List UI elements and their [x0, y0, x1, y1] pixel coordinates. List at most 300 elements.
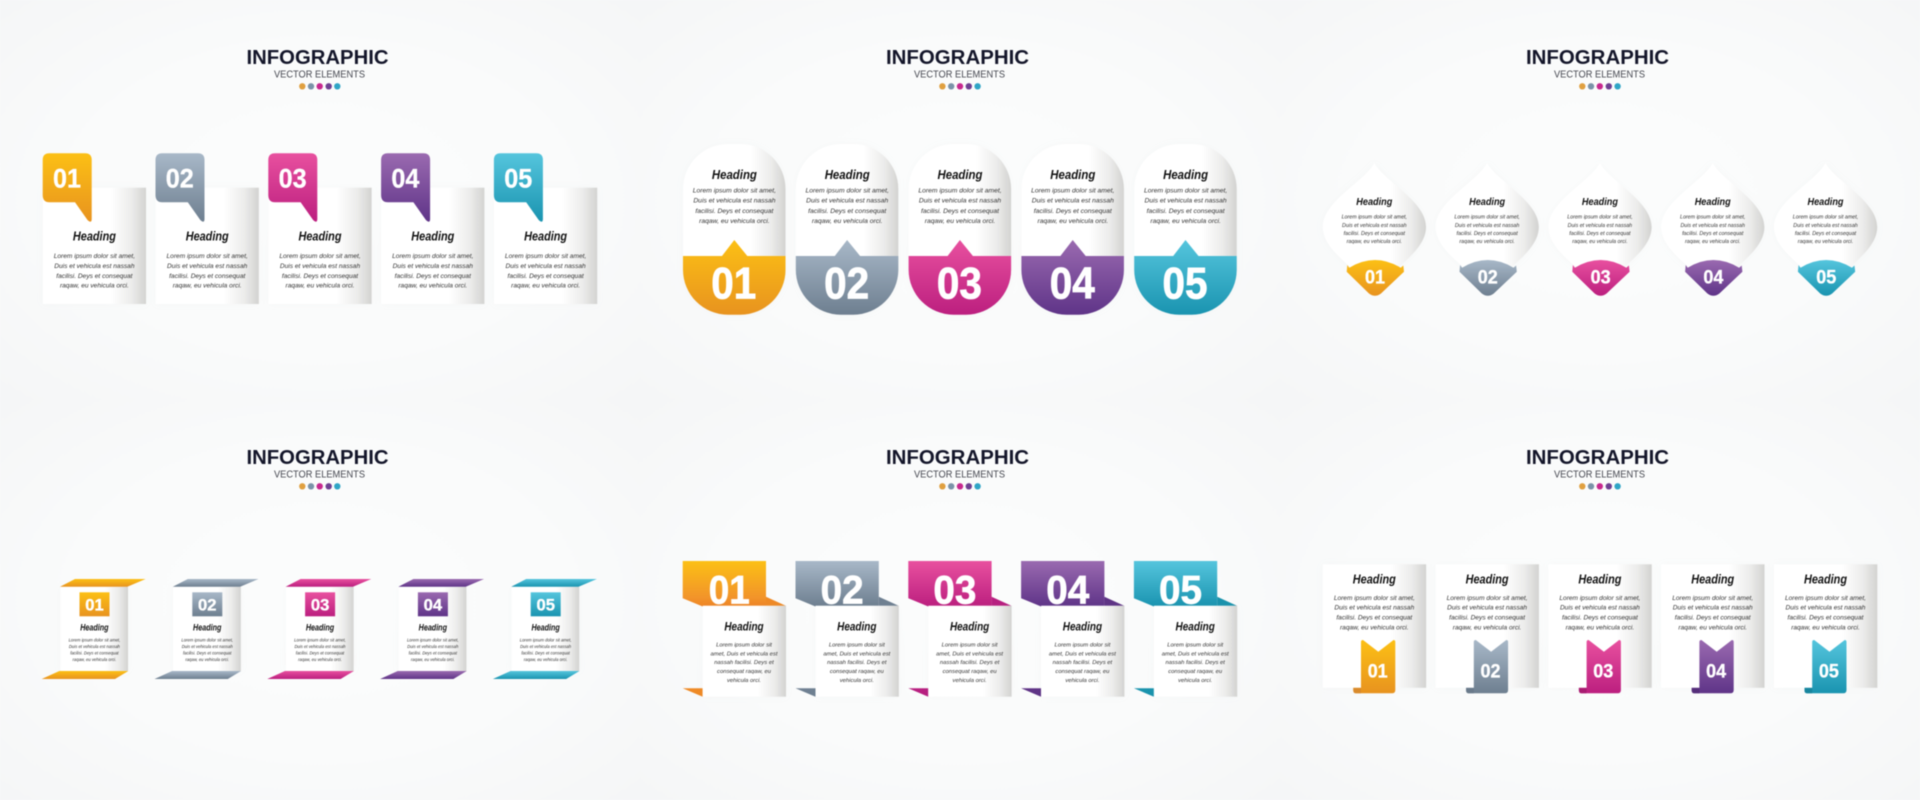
body text: raqaw, eu vehicula orci.: [925, 218, 995, 225]
card 02: [796, 144, 898, 315]
body text: Lorem ipsum dolor sit amet,: [1793, 215, 1858, 221]
card 02: [796, 561, 899, 697]
body text: facilisi. Deys et consequat: [1456, 231, 1518, 237]
pill body: [1021, 144, 1124, 315]
body text: Lorem ipsum dolor sit: [829, 642, 885, 648]
body text: Duis et vehicula est nassah: [1560, 605, 1640, 612]
ribbon curl: [1466, 688, 1474, 693]
body text: vehicula orci.: [727, 678, 761, 684]
body text: consequat raqaw, eu: [1168, 669, 1223, 675]
card 05: [494, 153, 597, 304]
panel background: [640, 0, 1280, 400]
title block: [886, 47, 1029, 90]
card 04: [1661, 163, 1764, 296]
heading: Heading: [73, 230, 116, 244]
title: INFOGRAPHIC: [886, 447, 1029, 469]
body text: Duis et vehicula est nassah: [1568, 223, 1632, 229]
body text: raqaw, eu vehicula orci.: [1678, 625, 1747, 632]
body text: Duis et vehicula est nassah: [182, 644, 233, 649]
number tag: [1685, 260, 1742, 296]
panel background: [640, 400, 1280, 800]
card 03: [909, 144, 1011, 315]
ribbon curl: [1353, 688, 1361, 693]
body text: Lorem ipsum dolor sit amet,: [693, 188, 776, 194]
card body: [268, 188, 372, 304]
card body: [173, 587, 241, 671]
panel: top-centre pill cards: [640, 0, 1280, 400]
card 03: [908, 561, 1012, 697]
body text: consequat raqaw, eu: [943, 669, 997, 675]
lower fold: [1021, 688, 1041, 697]
body text: raqaw, eu vehicula orci.: [524, 657, 567, 662]
heading: Heading: [299, 230, 342, 244]
number: 04: [1050, 259, 1095, 308]
pill body: [796, 144, 898, 315]
body text: Duis et vehicula est nassah: [1786, 605, 1866, 612]
panel: bottom-centre folded banner cards: [640, 400, 1280, 800]
card 05: [493, 579, 597, 679]
body text: raqaw, eu vehicula orci.: [1459, 239, 1515, 245]
heading: Heading: [1691, 572, 1735, 586]
bottom parallelogram: [154, 671, 241, 679]
ribbon: [1466, 640, 1508, 693]
panel background: [1280, 0, 1920, 400]
number base with pointer: [683, 240, 786, 315]
card 01: [683, 561, 786, 697]
body text: nassah facilisi. Deys et: [1053, 660, 1112, 666]
heading: Heading: [837, 620, 877, 634]
pill body: [683, 144, 786, 315]
body text: Lorem ipsum dolor sit: [1167, 642, 1223, 648]
number base with pointer: [796, 240, 898, 315]
body text: Lorem ipsum dolor sit amet,: [181, 638, 233, 642]
body text: Lorem ipsum dolor sit amet,: [294, 638, 346, 642]
panel: bottom-right ribbon cards: [1280, 400, 1920, 800]
body text: consequat raqaw, eu: [830, 669, 885, 675]
number: 02: [1478, 268, 1498, 288]
top parallelogram: [60, 579, 146, 587]
subtitle: VECTOR ELEMENTS: [914, 70, 1005, 80]
body text: raqaw, eu vehicula orci.: [1572, 239, 1628, 245]
title block: [246, 447, 388, 489]
subtitle: VECTOR ELEMENTS: [274, 470, 365, 480]
card 01: [1323, 564, 1426, 693]
title block: [1526, 47, 1669, 90]
panel background: [0, 400, 640, 800]
body text: nassah facilisi. Deys et: [827, 660, 887, 666]
card body: [1774, 564, 1877, 688]
banner: [683, 561, 766, 606]
body text: facilisi. Deys et consequat: [183, 650, 232, 656]
body text: raqaw, eu vehicula orci.: [699, 218, 770, 225]
body text: raqaw, eu vehicula orci.: [398, 283, 467, 290]
heading: Heading: [186, 230, 229, 244]
body text: facilisi. Deys et consequat: [921, 208, 1000, 215]
number square: [418, 592, 448, 616]
number: 05: [504, 163, 532, 193]
card body: [1323, 564, 1426, 688]
card 05: [1134, 561, 1237, 697]
number: 05: [1816, 268, 1837, 288]
card 01: [43, 153, 146, 304]
number tag: [268, 153, 317, 222]
body text: raqaw, eu vehicula orci.: [1566, 625, 1634, 632]
card 02: [156, 153, 259, 304]
body text: raqaw, eu vehicula orci.: [1791, 625, 1860, 632]
body text: Duis et vehicula est nassah: [407, 644, 459, 649]
colour dots: [1579, 483, 1621, 489]
body text: Duis et vehicula est nassah: [520, 644, 572, 649]
card body: [1436, 564, 1539, 688]
diamond body: [1548, 163, 1652, 291]
heading: Heading: [950, 620, 990, 634]
body text: facilisi. Deys et consequat: [1034, 208, 1113, 215]
lower fold: [1134, 688, 1154, 697]
body text: Duis et vehicula est nassah: [393, 263, 473, 270]
body text: Lorem ipsum dolor sit amet,: [1454, 215, 1520, 221]
heading: Heading: [80, 623, 109, 633]
number tag: [43, 153, 92, 222]
body text: Lorem ipsum dolor sit amet,: [505, 253, 586, 260]
number tag: [1460, 260, 1517, 296]
body text: facilisi. Deys et consequat: [1562, 615, 1639, 622]
bottom parallelogram: [380, 671, 467, 679]
card 05: [1134, 144, 1237, 315]
body text: Lorem ipsum dolor sit amet,: [279, 253, 361, 260]
diamond body: [1436, 163, 1539, 291]
body text: vehicula orci.: [840, 678, 874, 684]
body text: raqaw, eu vehicula orci.: [286, 283, 355, 290]
card body: [928, 606, 1012, 697]
card 05: [1774, 564, 1877, 693]
title: INFOGRAPHIC: [1526, 447, 1669, 469]
body text: Lorem ipsum dolor sit amet,: [392, 253, 474, 260]
body text: Lorem ipsum dolor sit amet,: [1447, 595, 1528, 602]
lower fold: [908, 688, 928, 697]
body text: nassah facilisi. Deys et: [940, 660, 1000, 666]
heading: Heading: [1176, 620, 1215, 634]
card body: [381, 188, 484, 304]
top parallelogram: [511, 579, 597, 587]
title block: [1526, 447, 1669, 489]
number tag: [381, 153, 430, 222]
subtitle: VECTOR ELEMENTS: [274, 70, 365, 80]
body text: Duis et vehicula est nassah: [69, 644, 121, 649]
number: 03: [937, 259, 982, 308]
number: 02: [166, 163, 194, 193]
heading: Heading: [1582, 196, 1618, 208]
card 01: [1323, 163, 1426, 296]
ribbon: [1579, 640, 1621, 693]
card 02: [1436, 564, 1539, 693]
body text: facilisi. Deys et consequat: [296, 650, 345, 656]
subtitle: VECTOR ELEMENTS: [1554, 470, 1645, 480]
body text: Duis et vehicula est nassah: [1334, 605, 1415, 612]
body text: vehicula orci.: [1065, 678, 1099, 684]
body text: Lorem ipsum dolor sit amet,: [1144, 188, 1227, 194]
diamond body: [1774, 163, 1877, 291]
banner: [796, 561, 879, 606]
card 05: [1774, 163, 1877, 296]
banner: [908, 561, 992, 606]
panel: top-right diamond cards: [1280, 0, 1920, 400]
number: 03: [1591, 268, 1611, 288]
body text: facilisi. Deys et consequat: [169, 273, 246, 280]
heading: Heading: [1353, 572, 1396, 586]
number: 04: [391, 163, 419, 193]
number: 05: [1162, 259, 1208, 308]
card body: [494, 188, 597, 304]
body text: Duis et vehicula est nassah: [1447, 605, 1527, 612]
heading: Heading: [825, 167, 870, 182]
heading: Heading: [419, 623, 447, 633]
card 04: [1021, 144, 1124, 315]
ribbon: [1692, 640, 1734, 693]
number square: [305, 592, 335, 616]
heading: Heading: [411, 230, 455, 244]
body text: Duis et vehicula est nassah: [1145, 198, 1227, 204]
body text: facilisi. Deys et consequat: [1569, 231, 1631, 237]
banner: [1021, 561, 1104, 606]
body text: Lorem ipsum dolor sit amet,: [69, 638, 120, 642]
number: 03: [279, 163, 307, 193]
number tag: [1347, 260, 1404, 296]
bottom parallelogram: [267, 671, 354, 679]
ribbon curl: [1692, 688, 1699, 693]
pill body: [909, 144, 1011, 315]
banner fold: [1217, 597, 1237, 606]
body text: Lorem ipsum dolor sit amet,: [918, 188, 1002, 194]
card body: [512, 587, 579, 671]
banner fold: [992, 597, 1011, 606]
diamond body: [1323, 163, 1426, 291]
card 03: [268, 153, 372, 304]
lower fold: [683, 688, 703, 697]
subtitle: VECTOR ELEMENTS: [914, 470, 1005, 480]
body text: facilisi. Deys et consequat: [70, 650, 119, 656]
title: INFOGRAPHIC: [246, 47, 388, 69]
ribbon: [1353, 640, 1395, 693]
number: 02: [198, 596, 217, 615]
heading: Heading: [1163, 167, 1208, 182]
heading: Heading: [1356, 196, 1393, 208]
card 04: [1661, 564, 1764, 693]
body text: nassah facilisi. Deys et: [1165, 660, 1225, 666]
colour dots: [299, 83, 340, 90]
body text: facilisi. Deys et consequat: [56, 273, 134, 280]
number: 02: [821, 568, 864, 612]
body text: Duis et vehicula est nassah: [693, 198, 776, 204]
body text: Duis et vehicula est nassah: [1793, 223, 1858, 229]
card 03: [267, 579, 371, 679]
body text: nassah facilisi. Deys et: [714, 660, 774, 666]
number tag: [494, 153, 543, 222]
body text: Lorem ipsum dolor sit amet,: [806, 188, 889, 194]
card body: [60, 587, 128, 671]
heading: Heading: [1469, 196, 1506, 208]
body text: Duis et vehicula est nassah: [806, 198, 889, 204]
heading: Heading: [524, 230, 567, 244]
title block: [886, 447, 1029, 489]
card 03: [1548, 564, 1652, 693]
body text: Lorem ipsum dolor sit amet,: [1559, 595, 1641, 602]
body text: Lorem ipsum dolor sit amet,: [1342, 215, 1407, 221]
body text: consequat raqaw, eu: [717, 669, 772, 675]
card body: [156, 188, 259, 304]
body text: vehicula orci.: [953, 678, 987, 684]
body text: amet, Duis et vehicula est: [711, 651, 778, 657]
number base with pointer: [1021, 240, 1124, 315]
body text: Lorem ipsum dolor sit amet,: [520, 638, 571, 642]
body text: facilisi. Deys et consequat: [1675, 615, 1752, 622]
body text: raqaw, eu vehicula orci.: [73, 657, 116, 662]
panel background: [1280, 400, 1920, 800]
card body: [703, 606, 786, 697]
card 01: [42, 579, 146, 679]
heading: Heading: [1695, 196, 1731, 208]
body text: facilisi. Deys et consequat: [695, 208, 775, 215]
body text: amet, Duis et vehicula est: [1162, 651, 1229, 657]
number tag: [1798, 260, 1855, 296]
body text: Lorem ipsum dolor sit amet,: [1785, 595, 1866, 602]
colour dots: [299, 483, 340, 489]
card 04: [1021, 561, 1124, 697]
heading: Heading: [724, 620, 764, 634]
top parallelogram: [286, 579, 371, 587]
panel background: [0, 0, 640, 400]
body text: raqaw, eu vehicula orci.: [298, 657, 342, 662]
body text: raqaw, eu vehicula orci.: [511, 283, 580, 290]
colour dots: [1579, 83, 1621, 90]
card body: [1041, 606, 1124, 697]
body text: Duis et vehicula est nassah: [295, 644, 346, 649]
body text: raqaw, eu vehicula orci.: [173, 283, 242, 290]
body text: Lorem ipsum dolor sit: [942, 642, 998, 648]
bottom parallelogram: [493, 671, 580, 679]
body text: raqaw, eu vehicula orci.: [60, 283, 129, 290]
body text: Lorem ipsum dolor sit amet,: [1672, 595, 1753, 602]
body text: raqaw, eu vehicula orci.: [185, 657, 229, 662]
number: 05: [536, 596, 555, 615]
banner fold: [879, 597, 898, 606]
body text: Lorem ipsum dolor sit amet,: [54, 253, 135, 260]
number: 03: [1593, 660, 1613, 682]
body text: Lorem ipsum dolor sit amet,: [1567, 215, 1633, 221]
banner fold: [766, 597, 786, 606]
ribbon curl: [1804, 688, 1812, 693]
number base with pointer: [909, 240, 1011, 315]
card body: [43, 188, 146, 304]
body text: facilisi. Deys et consequat: [1336, 615, 1413, 622]
heading: Heading: [1466, 572, 1509, 586]
body text: Lorem ipsum dolor sit amet,: [1680, 215, 1745, 221]
number: 04: [1703, 268, 1724, 288]
heading: Heading: [306, 623, 335, 633]
heading: Heading: [193, 623, 222, 633]
card body: [286, 587, 354, 671]
body text: vehicula orci.: [1178, 678, 1212, 684]
card body: [816, 606, 899, 697]
body text: consequat raqaw, eu: [1055, 669, 1110, 675]
panel: top-left speech-tag cards: [0, 0, 640, 400]
number: 01: [709, 568, 750, 612]
body text: raqaw, eu vehicula orci.: [812, 218, 883, 225]
number: 01: [711, 259, 756, 308]
number: 03: [311, 596, 329, 615]
body text: facilisi. Deys et consequat: [1449, 615, 1526, 622]
body text: Duis et vehicula est nassah: [919, 198, 1001, 204]
body text: raqaw, eu vehicula orci.: [1453, 625, 1522, 632]
number: 01: [53, 163, 81, 193]
card 04: [381, 153, 484, 304]
heading: Heading: [1063, 620, 1103, 634]
number: 05: [1159, 568, 1202, 612]
bottom parallelogram: [42, 671, 128, 679]
body text: Duis et vehicula est nassah: [280, 263, 360, 270]
body text: facilisi. Deys et consequat: [1795, 231, 1857, 237]
card body: [1661, 564, 1764, 688]
heading: Heading: [712, 167, 757, 182]
card 02: [1436, 163, 1539, 296]
body text: Duis et vehicula est nassah: [1680, 223, 1745, 229]
card body: [1548, 564, 1652, 688]
title block: [246, 47, 388, 90]
banner: [1134, 561, 1217, 606]
banner fold: [1104, 597, 1124, 606]
body text: Lorem ipsum dolor sit: [716, 642, 772, 648]
body text: Lorem ipsum dolor sit amet,: [1334, 595, 1415, 602]
number: 01: [1365, 268, 1385, 288]
number square: [531, 592, 561, 616]
body text: Duis et vehicula est nassah: [167, 263, 248, 270]
number tag: [1572, 260, 1630, 296]
card 03: [1548, 163, 1652, 296]
number square: [80, 592, 110, 616]
body text: facilisi. Deys et consequat: [1147, 208, 1226, 215]
number square: [192, 592, 222, 616]
body text: Lorem ipsum dolor sit amet,: [1031, 188, 1115, 194]
body text: raqaw, eu vehicula orci.: [1038, 218, 1108, 225]
card 01: [683, 144, 786, 315]
body text: raqaw, eu vehicula orci.: [1340, 625, 1409, 632]
card body: [399, 587, 466, 671]
ribbon curl: [1579, 688, 1587, 693]
number: 01: [1368, 660, 1388, 682]
colour dots: [939, 483, 981, 489]
body text: facilisi. Deys et consequat: [282, 273, 359, 280]
ribbon: [1804, 640, 1846, 693]
heading: Heading: [1050, 167, 1095, 182]
diamond body: [1661, 163, 1764, 291]
card 02: [154, 579, 258, 679]
colour dots: [939, 83, 981, 90]
body text: amet, Duis et vehicula est: [936, 651, 1003, 657]
body text: facilisi. Deys et consequat: [507, 273, 585, 280]
body text: Duis et vehicula est nassah: [505, 263, 586, 270]
body text: Lorem ipsum dolor sit amet,: [167, 253, 248, 260]
number: 03: [933, 568, 976, 612]
title: INFOGRAPHIC: [1526, 47, 1669, 69]
body text: Lorem ipsum dolor sit: [1054, 642, 1111, 648]
number: 05: [1819, 660, 1839, 682]
body text: raqaw, eu vehicula orci.: [1150, 218, 1221, 225]
title: INFOGRAPHIC: [246, 447, 388, 469]
body text: facilisi. Deys et consequat: [395, 273, 472, 280]
body text: raqaw, eu vehicula orci.: [1685, 239, 1740, 245]
heading: Heading: [1804, 572, 1847, 586]
number: 04: [1046, 568, 1090, 612]
body text: raqaw, eu vehicula orci.: [1798, 239, 1853, 245]
